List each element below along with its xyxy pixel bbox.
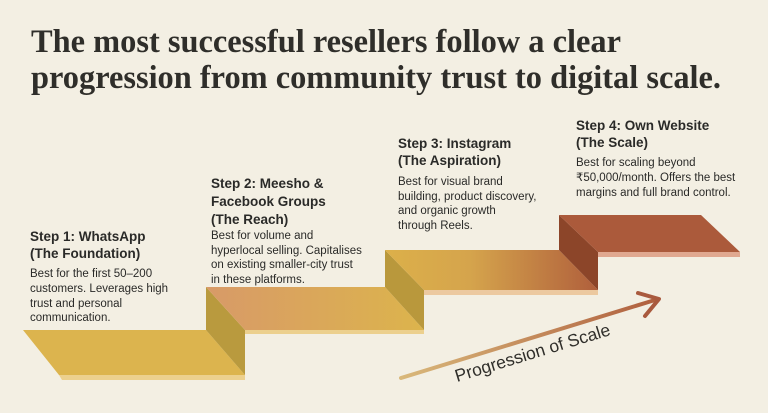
step 3 text: through Reels. bbox=[398, 220, 473, 232]
step 3 text: and organic growth bbox=[398, 205, 496, 217]
step 1 text: communication. bbox=[30, 312, 111, 324]
step 4 text: margins and full brand control. bbox=[576, 187, 731, 199]
step 2 text: Best for volume and bbox=[211, 230, 313, 242]
step 2 text: hyperlocal selling. Capitalises bbox=[211, 245, 362, 257]
step 3 text: Step 3: Instagram bbox=[398, 136, 511, 151]
step 2 text: Facebook Groups bbox=[211, 194, 326, 209]
step 3 text: (The Aspiration) bbox=[398, 153, 501, 168]
step 2 text: on existing smaller-city trust bbox=[211, 259, 354, 271]
step 4 text bbox=[576, 118, 736, 199]
title: The most successful resellers follow a clear bbox=[31, 24, 621, 60]
step 1 text: trust and personal bbox=[30, 298, 122, 310]
step 1 text bbox=[30, 229, 168, 324]
arrow: progression of scale bbox=[401, 293, 659, 378]
step 4 text: ₹50,000/month. Offers the best bbox=[576, 172, 736, 184]
step 4 text: (The Scale) bbox=[576, 135, 648, 150]
step 1 text: Best for the first 50–200 bbox=[30, 268, 152, 280]
step 1 text: Step 1: WhatsApp bbox=[30, 229, 146, 244]
step 2 text: (The Reach) bbox=[211, 212, 288, 227]
step 1 text: (The Foundation) bbox=[30, 246, 140, 261]
step 2 text bbox=[211, 176, 362, 286]
step 4 text: Step 4: Own Website bbox=[576, 118, 710, 133]
step 4 text: Best for scaling beyond bbox=[576, 157, 696, 169]
step 3 text: building, product discovery, bbox=[398, 191, 536, 203]
step 2 text: in these platforms. bbox=[211, 274, 305, 286]
title: progression from community trust to digital scale. bbox=[31, 60, 721, 96]
step 2 text: Step 2: Meesho & bbox=[211, 176, 324, 191]
step 1 text: customers. Leverages high bbox=[30, 283, 168, 295]
step 3 text bbox=[398, 136, 536, 232]
title bbox=[31, 24, 721, 96]
staircase bbox=[23, 215, 740, 380]
step 3 text: Best for visual brand bbox=[398, 176, 503, 188]
arrow label: Progression of Scale bbox=[452, 319, 613, 386]
